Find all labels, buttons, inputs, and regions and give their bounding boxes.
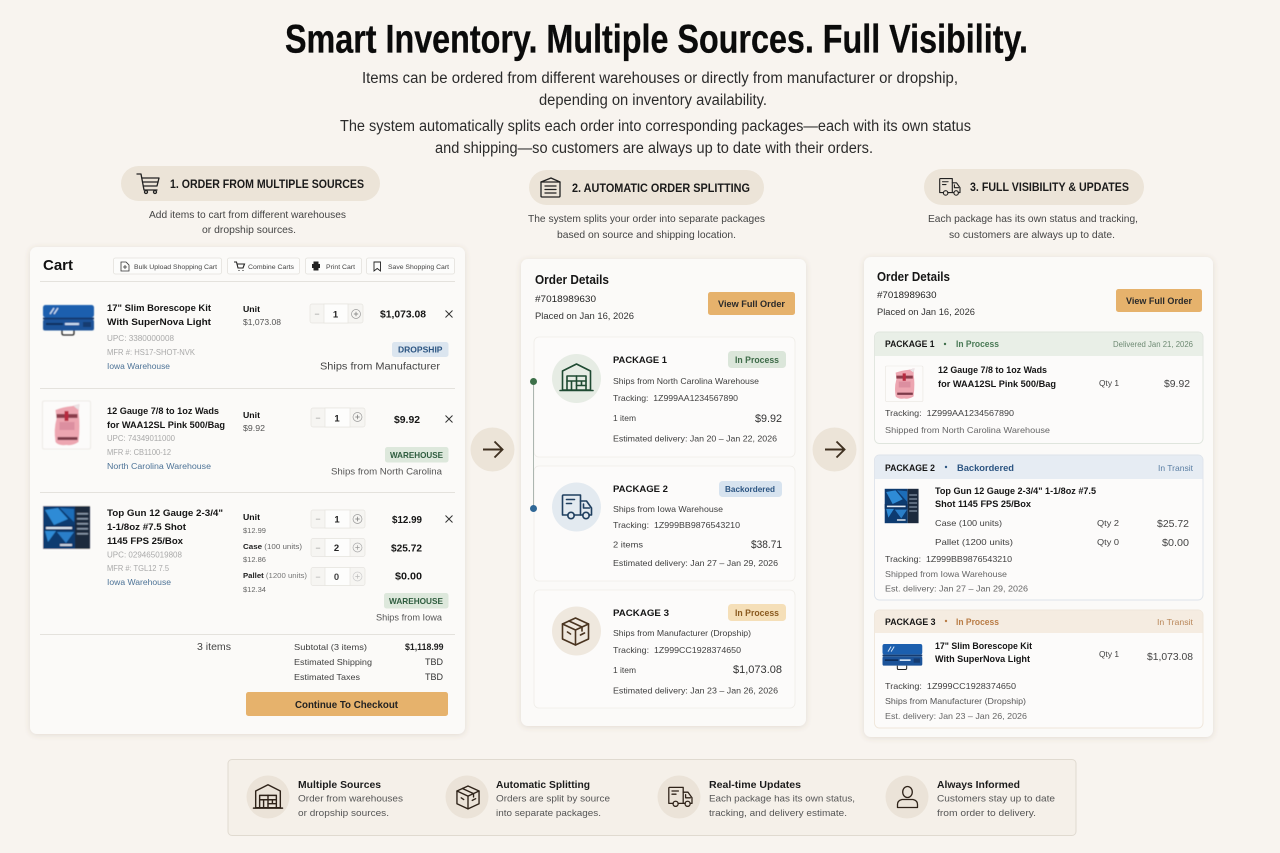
package 3 card: 1 item [613,665,636,675]
arrow: order to visibility [812,428,856,472]
benefit: always informed: Always Informed [937,779,1020,791]
step 1 heading: 1. ORDER FROM MULTIPLE SOURCES [170,179,364,191]
cart item: wads: Ships from North Carolina [331,466,443,478]
package 1 detail: In Process [956,339,999,349]
cart item: wads: − [315,413,321,423]
cart toolbar: Save Shopping Cart [388,264,449,271]
benefit: automatic splitting: Automatic Splitting [496,779,590,791]
order header: #7018989630 [877,290,936,300]
package 2 detail: PACKAGE 2 [885,463,935,473]
step 3 heading: 3. FULL VISIBILITY & UPDATES [970,182,1129,194]
cart totals [197,642,444,682]
package 3 card: Tracking: 1Z999CC1928374650 [613,645,741,655]
package 1 detail [874,332,1203,444]
step 1 heading: Add items to cart from different warehouses [149,209,346,221]
order header: View Full Order [718,299,785,309]
cart item: shotshells: $12.34 [243,585,266,594]
cart item: shotshells: $25.72 [391,544,422,554]
intro text [340,70,971,157]
package 2 card: 2 items [613,540,643,550]
package 2 detail: In Transit [1158,463,1194,473]
panel: order details with package cards [521,259,806,726]
cart toolbar: Bulk Upload Shopping Cart [134,264,217,271]
cart item: borescope kit: 17" Slim Borescope Kit [107,303,211,313]
package 2 detail: Tracking: 1Z999BB9876543210 [885,554,1012,564]
cart totals: Estimated Taxes [294,672,360,682]
package 1 card: 1 item [613,413,636,423]
package 2 card: Estimated delivery: Jan 27 – Jan 29, 2026 [613,558,778,568]
intro text: Items can be ordered from different warehouses or directly from manufacturer or dropship, [362,70,958,87]
cart totals: 3 items [197,642,231,653]
benefit: multiple sources: or dropship sources. [298,808,389,819]
icon: package document [541,178,560,197]
package 2 detail: Pallet (1200 units) [935,537,1013,547]
package 3 detail [874,610,1203,728]
cart item: borescope kit: Unit [243,304,260,314]
cart item: shotshells: − [315,514,321,524]
package 3 detail: Tracking: 1Z999CC1928374650 [885,681,1016,691]
cart item: shotshells: − [315,572,321,582]
cart item: borescope kit: DROPSHIP [398,344,443,354]
package 2 card [534,466,795,581]
benefit: automatic splitting [446,776,610,819]
cart item: shotshells: Ships from Iowa [376,612,443,624]
package 1 card: PACKAGE 1 [613,355,668,366]
step 2 heading [528,170,765,241]
cart item: shotshells: Top Gun 12 Gauge 2-3/4" [107,508,223,518]
cart item: shotshells: Unit [243,512,260,522]
cart item: borescope kit: Ships from Manufacturer [320,360,441,372]
package 2 card: Tracking: 1Z999BB9876543210 [613,520,740,530]
cart item: shotshells [42,505,452,624]
package 2 detail: Backordered [957,463,1014,473]
cart item: wads: WAREHOUSE [390,450,443,460]
package 1 detail: for WAA12SL Pink 500/Bag [938,379,1056,389]
package 3 card: Ships from Manufacturer (Dropship) [613,628,751,638]
package 2 detail: Shipped from Iowa Warehouse [885,569,1007,579]
benefit: real-time updates: Each package has its own status, [709,794,855,804]
package 1 card: Ships from North Carolina Warehouse [613,376,759,386]
cart item: wads: MFR #: CB1100-12 [107,448,172,457]
package 2 detail: Top Gun 12 Gauge 2-3/4" 1-1/8oz #7.5 [935,486,1096,496]
package 3 detail: PACKAGE 3 [885,617,936,627]
step 3 heading [924,169,1144,241]
package 2 card: PACKAGE 2 [613,484,668,495]
package 1 detail: Delivered Jan 21, 2026 [1113,340,1194,349]
cart item: shotshells: UPC: 029465019808 [107,550,183,560]
order header [877,270,1202,317]
benefit: always informed: from order to delivery. [937,808,1036,819]
cart item: shotshells: Iowa Warehouse [107,578,172,587]
benefit: automatic splitting: Orders are split by source [496,794,610,804]
package 1 card: Tracking: 1Z999AA1234567890 [613,393,738,403]
package 1 card: In Process [735,355,779,365]
cart toolbar [114,258,454,274]
cart item: wads: for WAA12SL Pink 500/Bag [107,420,225,430]
package 2 card: Backordered [725,484,775,494]
package 3 detail: With SuperNova Light [935,654,1030,664]
intro text: and shipping—so customers are always up to date with their orders. [435,140,873,157]
benefit: real-time updates [658,776,855,819]
package 3 detail: In Transit [1157,617,1194,627]
package 1 detail: $9.92 [1164,378,1190,390]
cart toolbar: Combine Carts [248,264,295,271]
arrow: cart to order [470,428,514,472]
package 3 detail: $1,073.08 [1147,651,1193,663]
package 3 detail: Qty 1 [1099,649,1119,659]
cart item: wads: 12 Gauge 7/8 to 1oz Wads [107,406,219,416]
intro text: depending on inventory availability. [539,92,767,109]
cart item: borescope kit [43,303,452,372]
benefit: real-time updates: Real-time Updates [709,779,801,791]
cart item: shotshells: $0.00 [395,572,422,582]
cart item: borescope kit: 1 [333,310,339,320]
package 1 detail: Shipped from North Carolina Warehouse [885,425,1050,435]
cart item: shotshells: 1145 FPS 25/Box [107,536,184,546]
package 2 detail: $0.00 [1162,537,1189,549]
icon: cart [137,174,159,194]
cart toolbar: Print Cart [326,264,355,271]
intro text: The system automatically splits each order into corresponding packages—each with its own status [340,118,971,135]
panel: cart [30,247,465,734]
order header: View Full Order [1126,296,1192,306]
benefit: multiple sources: Order from warehouses [298,794,403,804]
package 1 card [534,337,795,457]
cart item: borescope kit: With SuperNova Light [107,317,211,327]
package 1 card: $9.92 [755,413,782,425]
order header: #7018989630 [535,294,596,304]
package 2 detail: Shot 1145 FPS 25/Box [935,499,1032,509]
package 2 detail: Case (100 units) [935,518,1002,528]
benefit: automatic splitting: into separate packages. [496,808,601,819]
cart item: shotshells: MFR #: TGL12 7.5 [107,564,170,573]
step 2 heading: 2. AUTOMATIC ORDER SPLITTING [572,183,750,195]
package 3 detail: Ships from Manufacturer (Dropship) [885,696,1026,706]
step 3 heading: so customers are always up to date. [949,229,1115,241]
order header: Placed on Jan 16, 2026 [535,311,634,321]
cart item: shotshells: Pallet (1200 units) [243,571,308,580]
icon: truck [940,179,960,195]
cart item: borescope kit: Iowa Warehouse [107,362,171,371]
package 3 card: PACKAGE 3 [613,608,669,619]
cart item: shotshells: − [315,543,321,553]
cart item: shotshells: 1-1/8oz #7.5 Shot [107,522,186,532]
package 1 card: Estimated delivery: Jan 20 – Jan 22, 2026 [613,434,777,444]
step 1 heading [121,166,380,236]
checkout button [246,692,448,716]
cart item: shotshells: Case (100 units) [243,542,303,551]
cart item: borescope kit: UPC: 3380000008 [107,334,175,343]
benefit: multiple sources: Multiple Sources [298,779,381,791]
cart item: wads: $9.92 [394,415,420,426]
order header: Order Details [877,270,950,284]
order header: Order Details [535,273,609,287]
package 2 detail: $25.72 [1157,518,1189,530]
checkout button: Continue To Checkout [295,700,399,711]
panel: full visibility order details [864,257,1213,737]
cart item: wads: 1 [334,414,340,424]
cart item: shotshells: 1 [334,514,340,526]
package 2 detail: Qty 2 [1097,518,1119,528]
step 3 heading: Each package has its own status and tracking, [928,213,1138,225]
step 1 heading: or dropship sources. [202,224,296,236]
step 2 heading: The system splits your order into separate packages [528,213,765,225]
benefit: multiple sources [246,776,403,819]
package 3 detail: 17" Slim Borescope Kit [935,641,1032,651]
benefit: always informed: Customers stay up to date [937,794,1055,804]
package 1 detail: 12 Gauge 7/8 to 1oz Wads [938,365,1047,375]
package 3 card: $1,073.08 [733,664,782,676]
cart item: shotshells: $12.99 [243,526,266,535]
package 1 detail: Qty 1 [1099,378,1119,388]
cart item: shotshells: 2 [334,543,339,554]
benefit: real-time updates: tracking, and delivery estimate. [709,808,847,819]
package 1 detail: Tracking: 1Z999AA1234567890 [885,408,1014,418]
order header: Placed on Jan 16, 2026 [877,307,975,317]
cart item: borescope kit: $1,073.08 [243,317,281,327]
cart item: wads: $9.92 [243,423,265,433]
cart totals: Subtotal (3 items) [294,642,367,652]
cart heading: Cart [43,257,73,274]
status timeline [530,378,537,512]
cart totals: $1,118.99 [405,642,444,652]
package 3 detail: Est. delivery: Jan 23 – Jan 26, 2026 [885,711,1027,721]
package 2 detail [874,455,1203,600]
cart item: borescope kit: − [314,309,320,319]
package 3 detail: In Process [956,617,999,627]
order header [535,273,795,321]
package 2 card: $38.71 [751,539,782,551]
cart item: shotshells: 0 [334,572,339,583]
package 3 card: In Process [735,608,779,618]
package 2 detail: Qty 0 [1097,537,1119,547]
cart item: wads: North Carolina Warehouse [107,462,212,471]
package 3 card: Estimated delivery: Jan 23 – Jan 26, 2026 [613,686,778,696]
cart item: wads: Unit [243,410,260,420]
cart item: wads: UPC: 74349011000 [107,434,176,443]
cart totals: Estimated Shipping [294,657,372,667]
package 2 detail: Est. delivery: Jan 27 – Jan 29, 2026 [885,584,1028,594]
package 2 card: Ships from Iowa Warehouse [613,504,723,514]
package 1 detail: PACKAGE 1 [885,339,934,349]
cart item: borescope kit: $1,073.08 [380,310,426,320]
step 2 heading: based on source and shipping location. [557,229,736,241]
cart totals: TBD [425,657,444,667]
panel: benefits strip [228,760,1076,836]
title: Smart Inventory. Multiple Sources. Full Visibility. [285,18,1028,62]
benefit: always informed [886,776,1055,819]
cart item: shotshells: $12.86 [243,555,266,564]
cart item: shotshells: WAREHOUSE [389,596,443,606]
cart item: wads [42,401,452,478]
cart totals: TBD [425,672,444,682]
package 3 card [534,590,795,708]
cart item: shotshells: $12.99 [392,515,422,526]
cart item: borescope kit: MFR #: HS17-SHOT-NVK [107,348,196,357]
